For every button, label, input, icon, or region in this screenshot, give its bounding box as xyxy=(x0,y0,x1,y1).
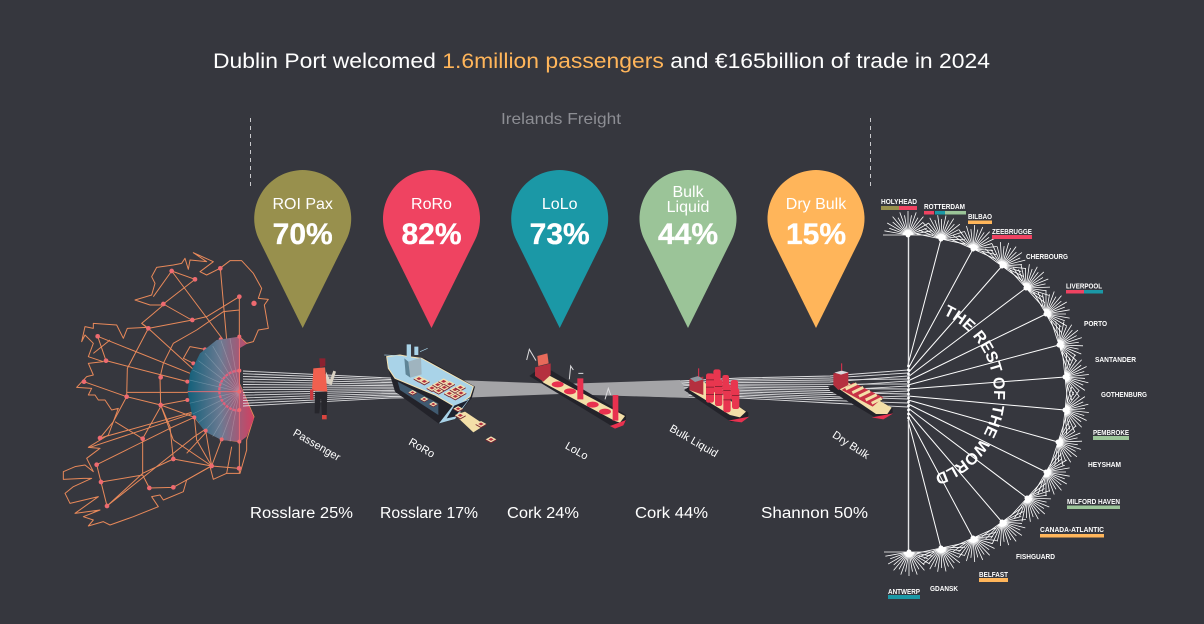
flow: grey band xyxy=(455,380,690,398)
port: Cherbourg: CHERBOURG xyxy=(1026,254,1069,261)
port: Bilbao: BILBAO xyxy=(968,214,992,221)
port: Milford Haven: MILFORD HAVEN xyxy=(1067,499,1120,506)
pin label: RoRo xyxy=(411,196,452,213)
port: Porto: PORTO xyxy=(1084,321,1108,328)
port: Belfast: BELFAST xyxy=(979,572,1009,579)
port: Santander: SANTANDER xyxy=(1095,357,1136,364)
port: Liverpool: LIVERPOOL xyxy=(1066,284,1103,290)
pin value: 73% xyxy=(530,218,590,251)
port: Pembroke: PEMBROKE xyxy=(1093,430,1129,437)
port: Rotterdam: ROTTERDAM xyxy=(924,204,965,211)
rest of the world radial diagram xyxy=(883,211,1089,576)
rotated label: RoRo: RoRo xyxy=(406,436,437,461)
rotated label: Passenger: Passenger xyxy=(291,427,343,464)
text: Rosslare 17%: Rosslare 17% xyxy=(380,505,478,522)
pin value: 44% xyxy=(658,218,718,251)
port: Antwerp: ANTWERP xyxy=(888,589,920,596)
icon: RoRo ship xyxy=(384,344,496,443)
text: Rosslare 25%: Rosslare 25% xyxy=(250,505,353,522)
port: Zeebrugge: ZEEBRUGGE xyxy=(992,229,1032,236)
pin label: ROI Pax xyxy=(272,196,333,213)
port: Fishguard: FISHGUARD xyxy=(1016,554,1055,561)
text: Shannon 50%: Shannon 50% xyxy=(761,505,868,522)
pin label: LoLo xyxy=(542,196,578,213)
map coastline xyxy=(63,253,268,526)
title: Dublin Port welcomed 1.6million passengers and €165billion of trade in 2024 xyxy=(213,49,990,73)
port: Canada-Atlantic xyxy=(1040,527,1104,538)
port: Heysham: HEYSHAM xyxy=(1088,462,1121,469)
pin label: Dry Bulk xyxy=(786,196,847,213)
heading: Irelands Freight: Irelands Freight xyxy=(501,111,622,128)
pin value: 82% xyxy=(401,218,462,251)
map of Ireland network xyxy=(63,253,268,526)
vertical axis xyxy=(908,235,910,552)
pin: Bulk Liquid xyxy=(640,170,736,328)
icon: passenger figure xyxy=(310,358,336,419)
rotated label: Dry Bulk: Dry Bulk xyxy=(830,429,872,462)
port: Belfast xyxy=(979,572,1009,582)
bracket: dashed right line xyxy=(870,118,872,186)
spokes xyxy=(908,239,1065,548)
pin label: Liquid xyxy=(667,199,709,216)
port: Liverpool xyxy=(1066,284,1103,294)
pin value: 70% xyxy=(273,218,333,251)
text: Cork 44%: Cork 44% xyxy=(635,505,708,522)
rotated label: LoLo: LoLo xyxy=(563,440,590,463)
pin: RoRo xyxy=(383,170,480,328)
icon: Dry Bulk ship xyxy=(828,363,893,419)
port: Gothenburg: GOTHENBURG xyxy=(1101,392,1147,399)
icon: LoLo ship xyxy=(527,349,626,429)
port: Holyhead xyxy=(881,199,917,210)
flow: line bundle xyxy=(243,370,908,407)
pin: LoLo xyxy=(511,170,608,328)
axis anchor ticks xyxy=(907,365,910,420)
port: Canada-Atlantic: CANADA-ATLANTIC xyxy=(1040,527,1104,534)
port: Milford Haven xyxy=(1067,499,1120,509)
port: Zeebrugge xyxy=(992,229,1032,239)
pin value: 15% xyxy=(786,218,846,251)
fan: Dublin hub xyxy=(185,335,254,444)
pin: Dry Bulk xyxy=(768,170,864,328)
port: Rotterdam xyxy=(924,204,966,214)
port: Gdansk: GDANSK xyxy=(930,586,958,593)
map route lines xyxy=(84,268,239,506)
rotated label: Bulk Liquid: Bulk Liquid xyxy=(667,423,720,460)
trade flow lines xyxy=(243,370,908,407)
pin label: Bulk xyxy=(672,184,704,201)
pin: ROI Pax xyxy=(254,170,351,328)
starbursts xyxy=(883,210,1091,577)
port: Bilbao xyxy=(968,214,992,224)
map nodes xyxy=(82,266,257,508)
text: Cork 24%: Cork 24% xyxy=(507,505,579,522)
bracket: dashed left line xyxy=(250,118,252,186)
port: Holyhead: HOLYHEAD xyxy=(881,199,917,206)
icon: Bulk Liquid ship xyxy=(684,368,749,422)
port: Antwerp xyxy=(888,589,920,599)
curved text: THE REST OF THE WORLD xyxy=(936,304,1006,484)
port: Pembroke xyxy=(1093,430,1129,440)
